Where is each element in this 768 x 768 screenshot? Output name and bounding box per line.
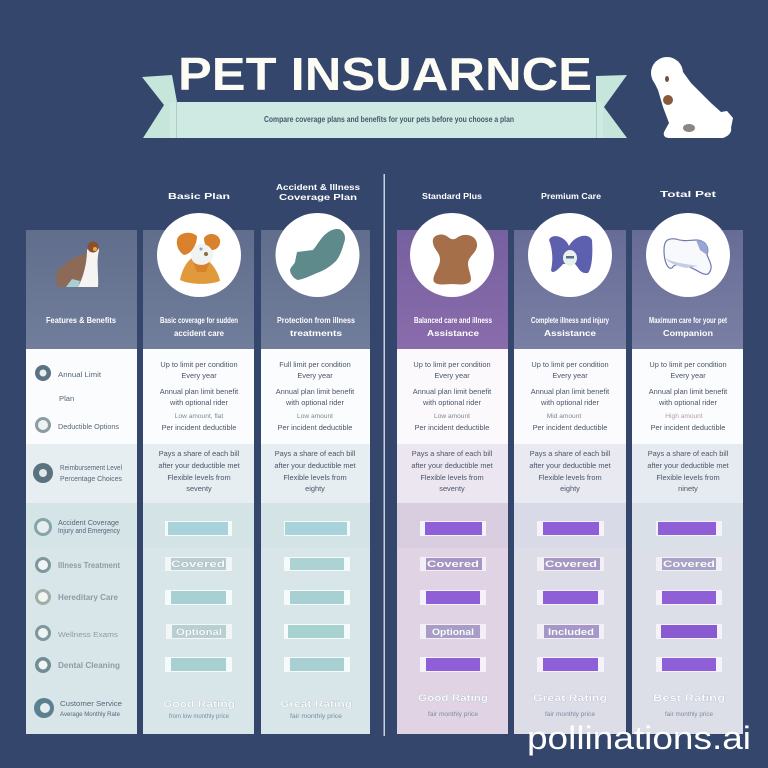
reimbursement text	[647, 449, 729, 493]
icon: white bone	[646, 213, 730, 297]
feature row: rating: Customer Service	[60, 699, 122, 708]
benefit text: Annual plan limit benefit	[160, 387, 238, 396]
rating text	[163, 699, 235, 720]
feature row: reimbursement: Reimbursement Level	[60, 463, 122, 472]
rating text: fair monthly price	[290, 713, 342, 720]
reimbursement text: eighty	[560, 484, 580, 493]
benefit text: Annual plan limit benefit	[531, 387, 609, 396]
benefit text: Up to limit per condition	[160, 360, 238, 369]
benefit text: Annual plan limit benefit	[276, 387, 354, 396]
column heading: plan 3: Standard Plus	[422, 192, 483, 201]
bar: wellness	[537, 624, 604, 639]
bar: wellness	[420, 624, 486, 639]
icon: brown bone	[410, 213, 494, 297]
feature row: hereditary	[35, 589, 119, 605]
bar: accidents	[420, 521, 486, 536]
divider	[384, 174, 385, 736]
icon: white dog	[651, 57, 733, 138]
benefit text	[413, 360, 491, 432]
rating text	[533, 693, 607, 718]
feature row: illness	[35, 557, 120, 573]
header text	[531, 316, 609, 338]
panel: plan 4	[514, 213, 626, 734]
header text: accident care	[174, 329, 225, 338]
bar: illness	[284, 557, 350, 571]
benefit text: High amount	[665, 413, 703, 420]
reimbursement text	[529, 449, 611, 493]
reimbursement text: Flexible levels from	[538, 473, 602, 482]
benefit text	[160, 360, 238, 432]
reimbursement text: Flexible levels from	[167, 473, 231, 482]
benefit text: Every year	[181, 371, 217, 380]
rating text: Good Rating	[418, 693, 488, 703]
header text: Assistance	[544, 329, 597, 338]
benefit text	[531, 360, 609, 432]
benefit text: Up to limit per condition	[413, 360, 491, 369]
benefit text: with optional rider	[422, 398, 481, 407]
benefit text: with optional rider	[540, 398, 599, 407]
bar: dental	[284, 657, 350, 672]
rating text: Best Rating	[653, 693, 725, 703]
benefit text: Per incident deductible	[651, 423, 725, 432]
bar: accidents	[284, 521, 350, 536]
feature row: wellness	[35, 625, 118, 641]
rating text: fair monthly price	[665, 711, 713, 718]
bar: illness: Covered	[663, 559, 715, 569]
rating text: from low monthly price	[169, 713, 229, 720]
column heading: plan 2	[276, 183, 361, 202]
benefit text: Annual plan limit benefit	[413, 387, 491, 396]
bar: wellness: Optional	[432, 627, 474, 637]
benefit text	[649, 360, 727, 432]
benefit text: with optional rider	[658, 398, 717, 407]
header text: treatments	[290, 329, 343, 338]
header text	[160, 316, 238, 338]
benefit text: Per incident deductible	[278, 423, 352, 432]
benefit text: Low amount, flat	[175, 413, 223, 420]
feature row: dental: Dental Cleaning	[58, 661, 120, 670]
rating text: Good Rating	[163, 699, 235, 709]
watermark: pollinations.ai	[527, 720, 751, 756]
benefit text: with optional rider	[285, 398, 344, 407]
feature row: coverage	[35, 365, 102, 403]
bar: hereditary	[284, 590, 350, 605]
reimbursement text: Pays a share of each bill	[412, 449, 493, 458]
benefit text: Every year	[670, 371, 706, 380]
feature row: hereditary: Hereditary Care	[58, 593, 119, 602]
header text: Maximum care for your pet	[649, 316, 727, 325]
reimbursement text: seventy	[439, 484, 465, 493]
feature row: accidents: Injury and Emergency	[58, 526, 120, 535]
feature row: coverage: Plan	[59, 394, 74, 403]
header text: Complete illness and injury	[531, 316, 609, 325]
bar: dental	[656, 657, 722, 672]
bar: illness: Covered	[427, 559, 479, 569]
panel: plan 5	[632, 213, 743, 734]
bar: illness	[537, 557, 604, 571]
benefit text: Low amount	[434, 413, 470, 420]
bar: hereditary	[537, 590, 604, 605]
bar: wellness	[166, 624, 232, 639]
reimbursement text: after your deductible met	[274, 461, 356, 470]
feature row: accidents: Accident Coverage	[58, 518, 119, 527]
header text: Companion	[663, 329, 713, 338]
benefit text: Annual plan limit benefit	[649, 387, 727, 396]
reimbursement text: Pays a share of each bill	[275, 449, 356, 458]
reimbursement text: ninety	[678, 484, 698, 493]
benefit text: Per incident deductible	[162, 423, 236, 432]
column heading: plan 2: Coverage Plan	[279, 193, 357, 202]
bar: dental	[420, 657, 486, 672]
feature row: reimbursement: Percentage Choices	[60, 474, 122, 483]
reimbursement text	[274, 449, 356, 493]
bar: wellness	[284, 624, 350, 639]
panel: plan 3	[397, 213, 508, 734]
column heading: plan 5: Total Pet	[660, 190, 717, 199]
bar: accidents	[165, 521, 232, 536]
feature row: accidents	[34, 518, 120, 536]
panel: plan 1	[143, 213, 254, 734]
benefit text: Up to limit per condition	[531, 360, 609, 369]
reimbursement text: Flexible levels from	[283, 473, 347, 482]
reimbursement text: Flexible levels from	[656, 473, 720, 482]
benefit text: Every year	[552, 371, 588, 380]
feature row: wellness: Wellness Exams	[58, 630, 118, 639]
bar: wellness	[656, 624, 722, 639]
bar: dental	[537, 657, 604, 672]
subtitle: Compare coverage plans and benefits for your pets before you choose a plan	[264, 115, 514, 124]
reimbursement text: after your deductible met	[411, 461, 493, 470]
feature row: reimbursement	[33, 463, 122, 483]
rating text: fair monthly price	[428, 711, 478, 718]
panel: plan 2	[261, 213, 370, 734]
benefit text: Every year	[434, 371, 470, 380]
reimbursement text: after your deductible met	[647, 461, 729, 470]
bar: wellness: Optional	[176, 627, 222, 637]
benefit text: Every year	[297, 371, 333, 380]
feature row: dental	[35, 657, 120, 673]
reimbursement text: Pays a share of each bill	[159, 449, 240, 458]
header text: Assistance	[427, 329, 480, 338]
rating text	[418, 693, 488, 718]
bar: hereditary	[165, 590, 232, 605]
icon: orange puppy	[157, 213, 241, 297]
feature row: rating	[34, 698, 122, 718]
header text: Basic coverage for sudden	[160, 316, 238, 325]
column heading: plan 2: Accident & Illness	[276, 183, 361, 192]
rating text: fair monthly price	[545, 711, 595, 718]
column heading: plan 1: Basic Plan	[168, 192, 230, 201]
feature row: coverage: Annual Limit	[58, 370, 102, 379]
reimbursement text: eighty	[305, 484, 325, 493]
bar: illness	[420, 557, 486, 571]
feature row: deductible	[35, 417, 119, 433]
reimbursement text	[411, 449, 493, 493]
benefit text: Low amount	[297, 413, 333, 420]
bar: hereditary	[420, 590, 486, 605]
reimbursement text: seventy	[186, 484, 212, 493]
header text: Balanced care and illness	[414, 316, 492, 325]
benefit text	[276, 360, 354, 432]
bar: illness	[165, 557, 232, 571]
reimbursement text: Pays a share of each bill	[530, 449, 611, 458]
icon: teal blob	[276, 213, 360, 297]
benefit text: Mid amount	[547, 413, 581, 420]
rating text	[280, 699, 352, 720]
benefit text: Per incident deductible	[415, 423, 489, 432]
panel: feature labels	[26, 230, 137, 734]
bar: illness	[656, 557, 722, 571]
column heading: plan 4: Premium Care	[541, 192, 602, 201]
reimbursement text: Pays a share of each bill	[648, 449, 729, 458]
title banner	[142, 75, 627, 138]
rating text: Great Rating	[280, 699, 352, 709]
benefit text: Full limit per condition	[279, 360, 351, 369]
feature row: rating: Average Monthly Rate	[60, 711, 120, 718]
benefit text: Per incident deductible	[533, 423, 607, 432]
reimbursement text: after your deductible met	[529, 461, 611, 470]
header text	[277, 316, 355, 338]
reimbursement text: after your deductible met	[158, 461, 240, 470]
title: PET INSUARNCE	[178, 48, 592, 100]
header label: Features & Benefits	[46, 316, 117, 325]
bar: dental	[165, 657, 232, 672]
header text	[649, 316, 727, 338]
rating text: Great Rating	[533, 693, 607, 703]
benefit text: with optional rider	[169, 398, 228, 407]
reimbursement text	[158, 449, 240, 493]
bar: wellness: Included	[548, 627, 594, 637]
icon: purple puppy	[528, 213, 612, 297]
bar: accidents	[537, 521, 604, 536]
bar: illness: Covered	[171, 559, 225, 569]
rating text	[653, 693, 725, 718]
benefit text: Up to limit per condition	[649, 360, 727, 369]
feature row: illness: Illness Treatment	[58, 561, 120, 570]
bar: illness: Covered	[545, 559, 597, 569]
reimbursement text: Flexible levels from	[420, 473, 484, 482]
header text	[414, 316, 492, 338]
icon: sitting dog	[56, 242, 99, 287]
feature row: deductible: Deductible Options	[58, 422, 119, 431]
bar: hereditary	[656, 590, 722, 605]
header text: Protection from illness	[277, 316, 355, 325]
bar: accidents	[656, 521, 722, 536]
